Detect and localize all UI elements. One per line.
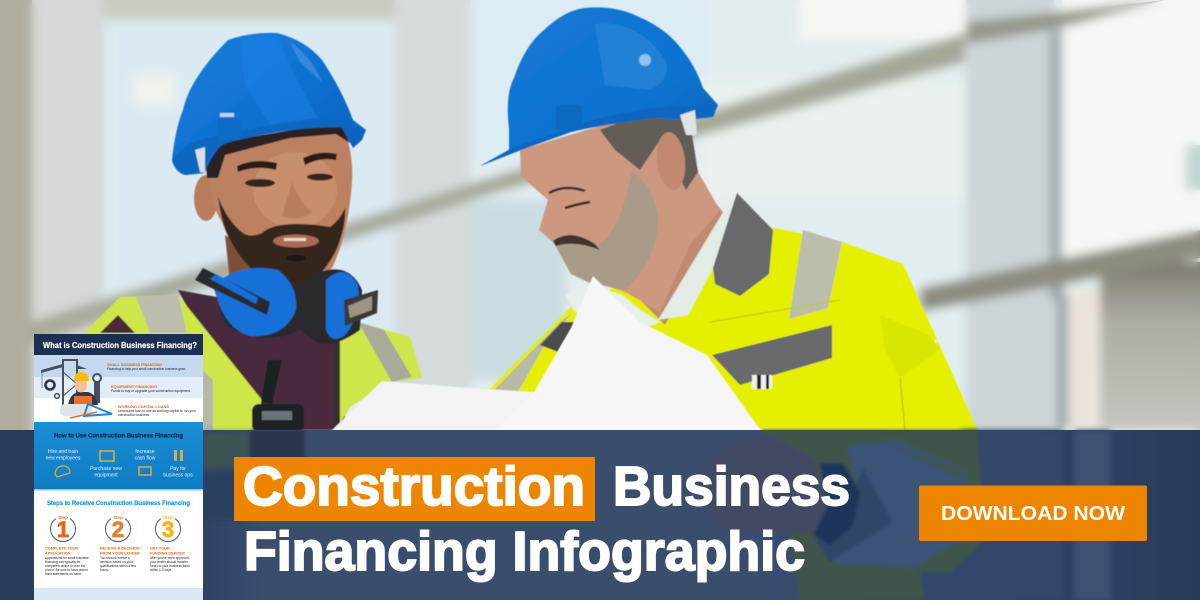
shirt — [178, 290, 345, 430]
step 2: You should receive a — [100, 556, 130, 560]
how to use section: How to Use Construction Business Financing — [54, 432, 183, 440]
how to use section: Increase — [135, 449, 155, 455]
how to use section: equipment — [94, 472, 118, 478]
safety vest — [84, 295, 422, 430]
head — [520, 115, 720, 312]
man on the left — [84, 33, 422, 432]
step 3: Step — [163, 515, 173, 520]
eyes and brows — [237, 161, 277, 172]
step 1: APPLICATION — [45, 552, 71, 556]
ear defenders — [195, 268, 378, 344]
icon: crane and worker — [41, 360, 112, 418]
step 3: within 1-3 days. — [150, 568, 172, 572]
how to use section: cash flow — [135, 456, 156, 462]
financing types: Unsecured loan to use as working capital to run your — [118, 409, 197, 413]
title word Business: Business — [613, 455, 850, 517]
financing types: WORKING CAPITAL LOANS — [118, 404, 169, 409]
blue hard hat left — [172, 33, 366, 175]
neck and shirt — [630, 170, 725, 325]
infographic thumbnail — [34, 334, 203, 600]
step 3: GET YOUR — [150, 546, 170, 550]
thumbnail footer strip — [34, 588, 203, 600]
how to use section: new employees — [46, 456, 81, 462]
step 1: phone. Be sure to have recent — [45, 568, 88, 572]
how to use section: Pay for — [170, 466, 186, 472]
how to use section — [34, 422, 203, 490]
man on the right — [480, 7, 980, 436]
step 3: your lender should transfer — [150, 560, 189, 564]
financing types: construction business. — [118, 413, 150, 417]
step 1: 1 — [57, 517, 69, 542]
grey collar — [713, 193, 773, 296]
step 1: completed online or over the — [45, 564, 85, 568]
title — [234, 455, 850, 582]
step 1: Applications for small business — [45, 556, 89, 560]
face — [210, 118, 352, 285]
thumbnail header: What is Construction Business Financing? — [43, 340, 197, 350]
step 2: Step — [113, 515, 123, 520]
step 1: Step — [58, 515, 68, 520]
blue hard hat right — [480, 7, 718, 166]
ear — [194, 175, 218, 221]
neck — [225, 235, 320, 310]
blueprint paper — [330, 276, 762, 432]
financing types: SMALL BUSINESS FINANCING — [107, 362, 162, 367]
walkie talkie — [252, 360, 304, 432]
yellow hi-vis jacket — [490, 225, 980, 436]
steps section: Steps to Receive Construction Business Financing — [47, 500, 190, 507]
download button: DOWNLOAD NOW — [941, 502, 1126, 525]
thumbnail header — [34, 334, 203, 355]
grey beard — [554, 170, 658, 290]
ghost: background columns — [203, 430, 1110, 600]
download button — [919, 486, 1147, 541]
step 1: COMPLETE YOUR — [45, 546, 78, 550]
step 1: bank statements on hand. — [45, 572, 82, 576]
ghost: arm and hand of right man — [250, 430, 985, 600]
financing types: Funds to buy or upgrade your construction equipment. — [111, 389, 191, 393]
title word Construction: Construction — [243, 455, 585, 517]
how to use section: Hire and train — [48, 449, 78, 455]
financing types — [34, 355, 203, 417]
dark blue title banner — [0, 430, 1200, 600]
step 2: hours. — [100, 568, 109, 572]
orange highlight behind Construction — [234, 457, 595, 521]
step 3: 3 — [162, 517, 174, 542]
shadow under brim — [205, 122, 350, 178]
financing types: EQUIPMENT FINANCING — [111, 384, 157, 389]
ear — [654, 131, 688, 191]
step 3 — [150, 514, 190, 572]
step 2: qualifications within a few — [100, 564, 137, 568]
step 1: financing can typically be — [45, 560, 81, 564]
step 2: 2 — [112, 517, 124, 542]
step 2: RECEIVE A DECISION — [100, 546, 140, 550]
step 3: After you've been approved, — [150, 556, 190, 560]
step 2 — [100, 514, 140, 572]
beard — [218, 197, 345, 287]
how to use section: Purchase new — [90, 466, 122, 472]
title line two: Financing Infographic — [244, 520, 805, 582]
steps section — [45, 500, 190, 576]
how to use section: business ops — [163, 472, 193, 478]
step 3: FUNDING DEPOSIT — [150, 552, 186, 556]
step 1 — [45, 514, 89, 576]
step 2: FROM YOUR LENDER — [100, 552, 140, 556]
step 3: funds to your business bank — [150, 564, 190, 568]
step 2: decision based on your — [100, 560, 134, 564]
financing types: Financing to help your small construction business grow. — [107, 367, 186, 371]
grey hair — [600, 112, 698, 190]
